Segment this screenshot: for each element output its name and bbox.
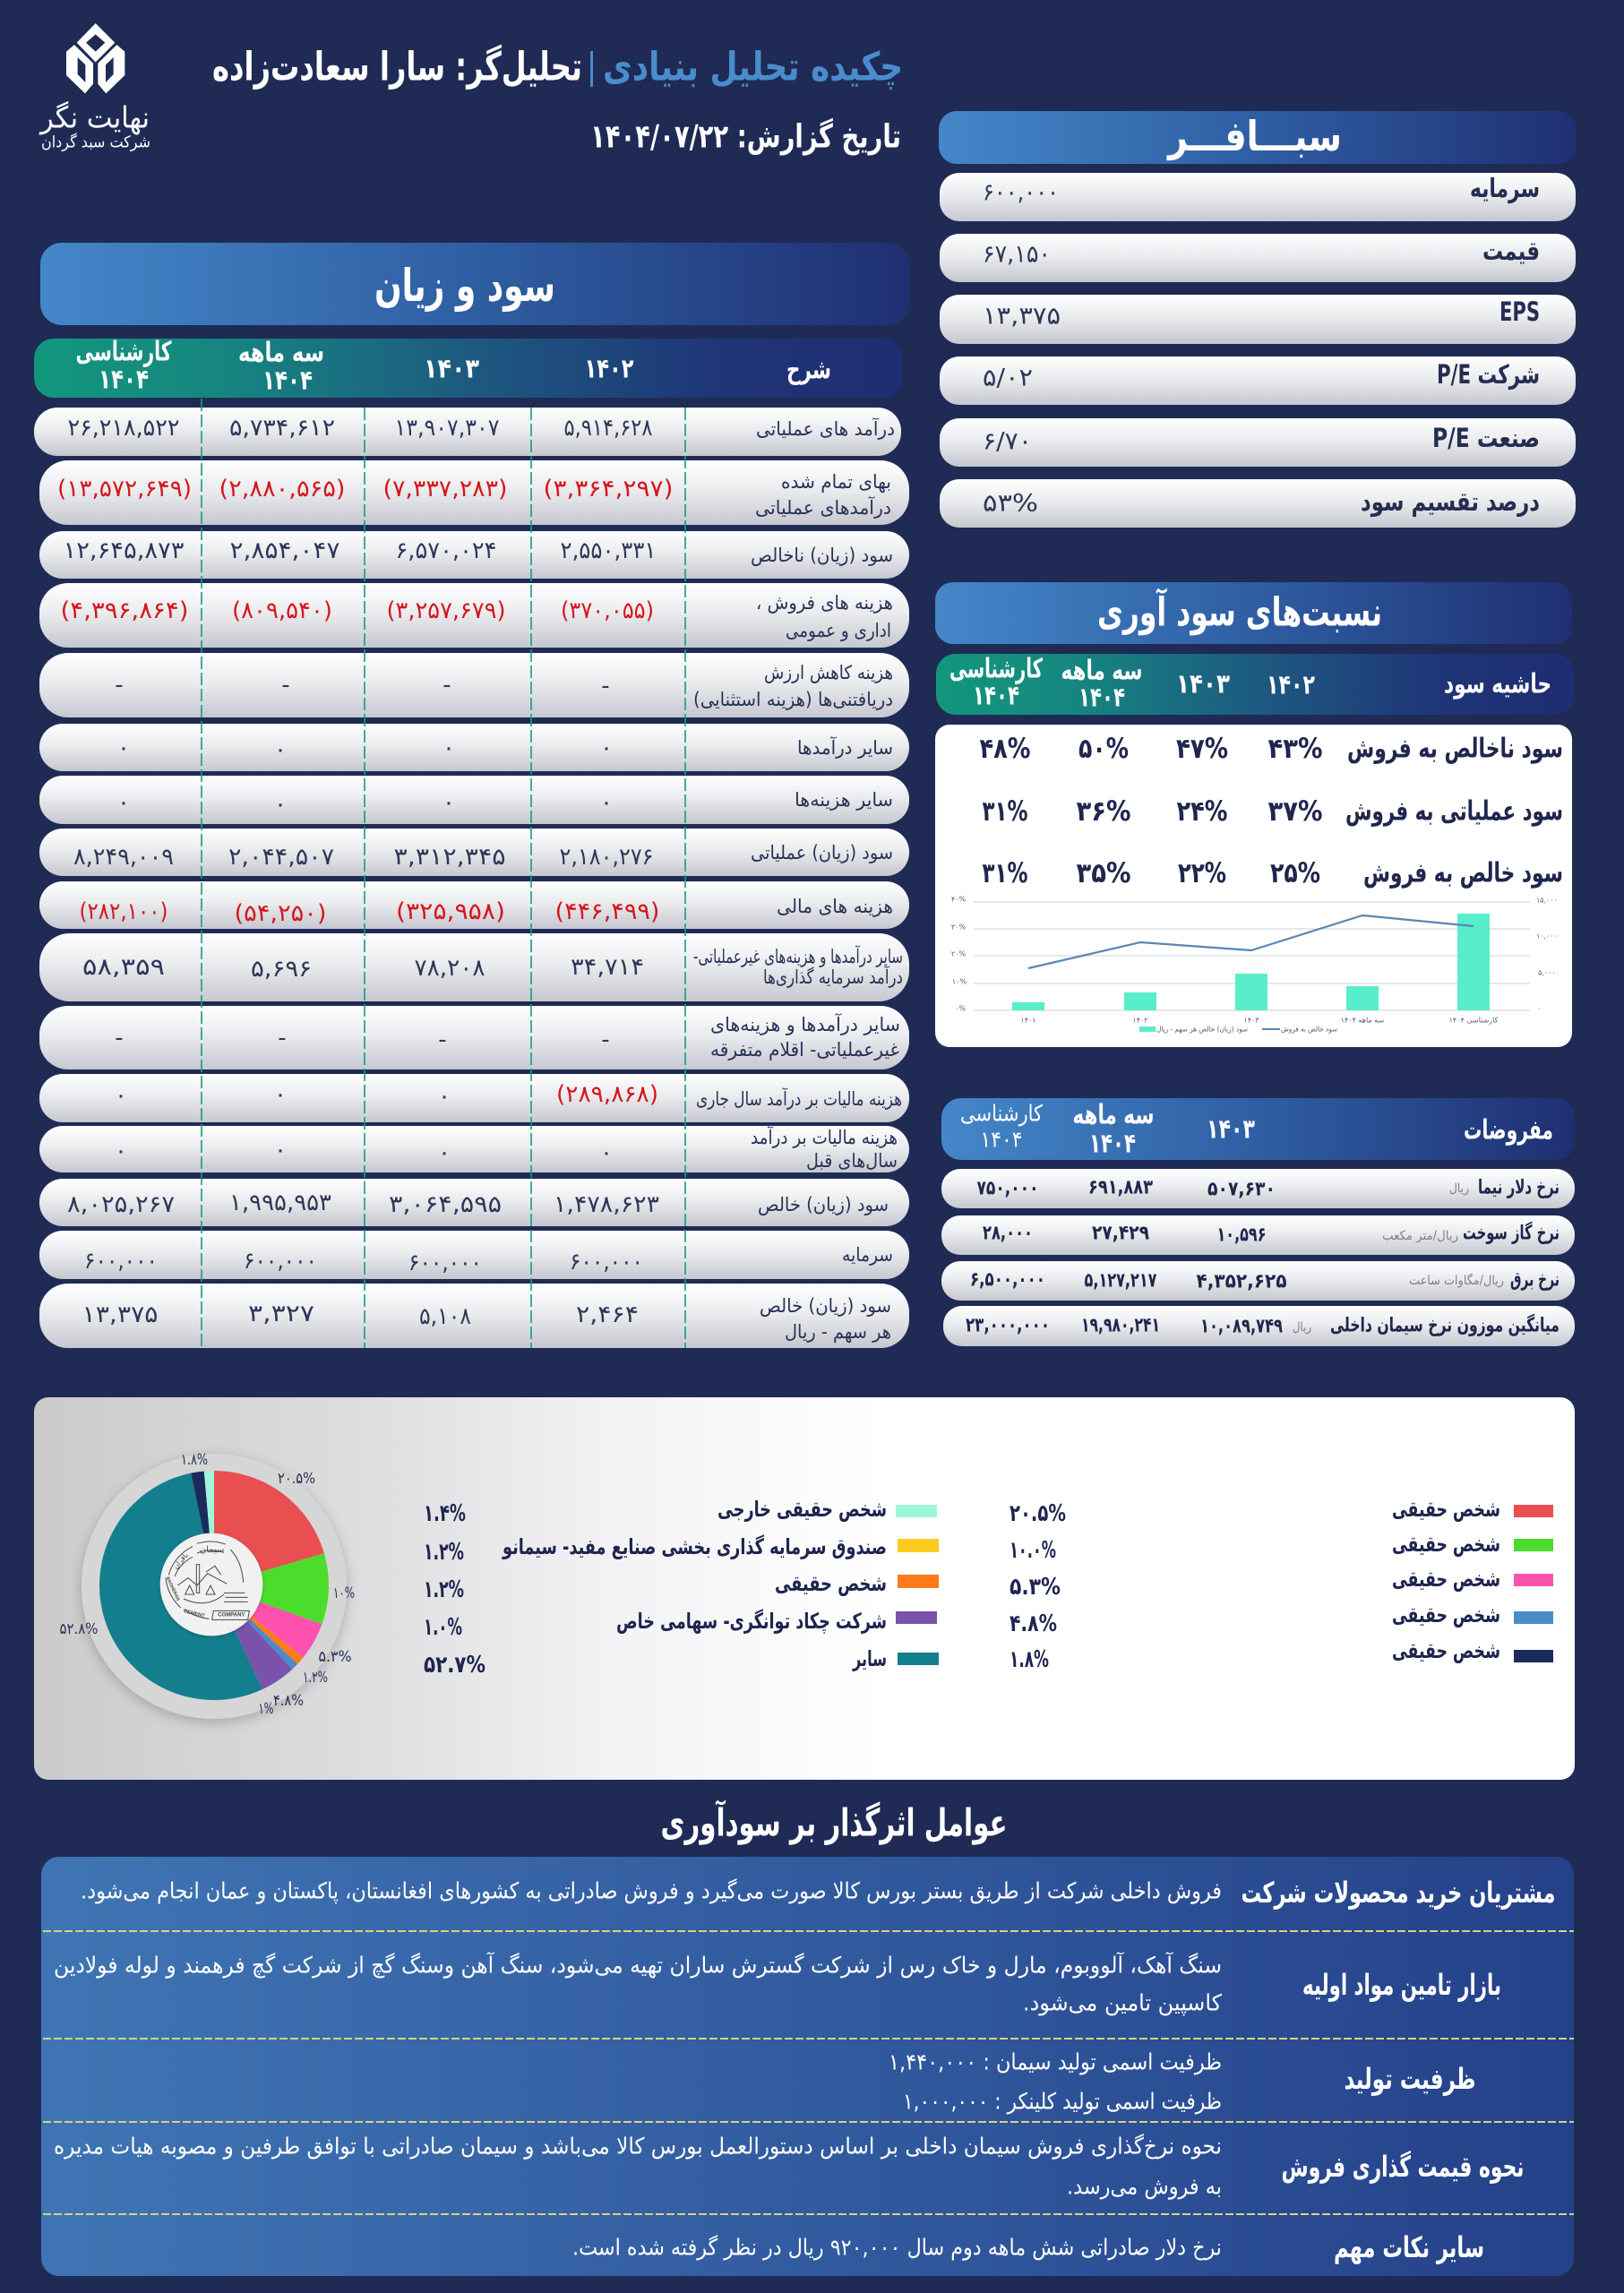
ratio: net margin: ۲۵% (1270, 857, 1320, 889)
row: net profit: ۱,۴۷۸,۶۲۳ (554, 1191, 659, 1218)
row: selling and admin expenses: (۴,۳۹۶,۸۶۴) (61, 597, 188, 624)
chart: shareholder donut (59, 1451, 355, 1719)
ratio: net margin: ۳۵% (1077, 857, 1130, 889)
row: capital: سرمایه (1470, 173, 1540, 203)
legend column 2 (502, 1497, 939, 1671)
row: other revenue: سایر درآمدها (797, 736, 893, 759)
row: gross profit: ۶,۵۷۰,۰۲۴ (396, 537, 496, 564)
table header (34, 337, 902, 398)
percentages column 1: ۱۰.۰% (1010, 1537, 1056, 1564)
row: operating revenue: ۵,۹۱۴,۶۲۸ (564, 415, 653, 442)
row: other revenue: ۰ (443, 734, 455, 761)
row: net profit: سود (زیان) خالص (758, 1194, 889, 1215)
left axis labels: ۱۰% (952, 978, 967, 985)
assumptions header: کارشناسی (960, 1100, 1043, 1127)
percentages column 2: ۵۲.۷% (424, 1652, 485, 1679)
row: capital (940, 173, 1576, 221)
row: non-operating investment income: ۵,۶۹۶ (251, 956, 312, 983)
row: EPS (940, 295, 1576, 344)
table header: سه ماهه (238, 337, 324, 369)
ratio: operating margin: ۲۴% (1177, 795, 1227, 828)
row: operating revenue (34, 408, 901, 456)
row: non-operating investment income: درآمد سرمایه گذاری‌ها (763, 966, 903, 988)
row: price: ۶۷,۱۵۰ (983, 240, 1051, 269)
row: operating revenue: ۱۳,۹۰۷,۳۰۷ (394, 415, 500, 442)
left axis labels: ۴۰% (951, 896, 966, 903)
legend column 1: شخص حقیقی (1392, 1638, 1500, 1663)
row: cost of revenue: بهای تمام شده (781, 471, 891, 493)
row: current year income tax (39, 1074, 909, 1122)
row: net profit: ۸,۰۲۵,۲۶۷ (67, 1191, 175, 1218)
row: impairment expense: - (281, 672, 290, 699)
category labels: ۱۴۰۲ (1132, 1016, 1148, 1025)
row: financial expenses: (۳۲۵,۹۵۸) (396, 898, 505, 925)
title: تحلیل‌گر: سارا سعادت‌زاده (212, 43, 582, 90)
percentages column 2: ۱.۲% (424, 1576, 464, 1603)
ratio: gross margin (980, 733, 1563, 765)
row: capital: ۶۰۰,۰۰۰ (983, 179, 1059, 206)
row: capital: ۶۰۰,۰۰۰ (84, 1248, 158, 1275)
row: other revenue (39, 724, 909, 771)
ratio: operating margin: ۳۱% (982, 795, 1028, 828)
row: current year income tax: ۰ (274, 1081, 287, 1108)
row: weighted cement price: ریال (1293, 1320, 1311, 1335)
ratio: operating margin (982, 795, 1563, 828)
left axis labels: ۳۰% (951, 923, 966, 932)
row: impairment expense (39, 653, 909, 717)
factor: sales pricing (54, 2134, 1525, 2200)
heading: profitability ratios: نسبت‌های سود آوری (1097, 588, 1382, 636)
percentages column 2 (424, 1500, 485, 1679)
row: industry P/E (940, 418, 1576, 467)
factor: sales pricing: نحوه نرخ‌گذاری فروش سیمان داخلی بر اساس دستورالعمل بورس کالا می‌باشد و سیمان صادراتی با توافق طرفین و مصوبه هیات مدیره (54, 2134, 1222, 2160)
table header: کارشناسی (75, 337, 172, 367)
percentages column 2: ۱.۴% (424, 1500, 466, 1527)
row: selling and admin expenses: (۳۷۰,۰۵۵) (561, 597, 654, 624)
row: other expenses (39, 776, 909, 824)
row: cost of revenue: درآمدهای عملیاتی (755, 496, 891, 519)
assumptions header: ۱۴۰۴ (1089, 1129, 1136, 1159)
row: other expenses: ۰ (443, 789, 455, 816)
legend column 2: شرکت چکاد توانگری- سهامی خاص (616, 1609, 887, 1634)
legend column 1 (1392, 1497, 1553, 1663)
company emblem: COMPANY (218, 1612, 245, 1618)
legend column 2: سایر (852, 1646, 887, 1671)
table header: ۱۴۰۲ (584, 353, 634, 385)
row: impairment expense: - (601, 673, 610, 700)
company emblem: سیمان (200, 1545, 224, 1555)
row: cost of revenue: (۲,۸۸۰,۵۶۵) (219, 476, 346, 502)
company emblem (160, 1533, 262, 1636)
row: Nima dollar rate (941, 1169, 1575, 1208)
row: Nima dollar rate: ۶۹۱,۸۸۳ (1088, 1177, 1153, 1198)
donut labels: ۱.۲% (303, 1669, 328, 1687)
donut labels: ۱% (258, 1700, 274, 1718)
legend column 2: صندوق سرمایه گذاری بخشی صنایع مفید- سیمانو (502, 1534, 887, 1559)
row: non-operating miscellaneous: سایر درآمدها و هزینه‌های (710, 1013, 900, 1035)
panel: shareholders (34, 1397, 1575, 1780)
heading: profitability ratios (935, 582, 1572, 644)
company emblem: CEMENT (183, 1609, 205, 1619)
icon: logo mark (66, 23, 125, 93)
factor: sales pricing: به فروش می‌رسد. (1067, 2173, 1222, 2200)
heading: profit and loss (40, 243, 909, 325)
row: current year income tax: هزینه مالیات بر درآمد سال جاری (696, 1087, 902, 1110)
row: financial expenses: هزینه های مالی (777, 896, 893, 917)
row: selling and admin expenses: هزینه های فروش ، (756, 592, 893, 614)
assumptions header (941, 1098, 1575, 1160)
row: impairment expense: - (115, 672, 124, 699)
row: electricity rate: ریال/مگاوات ساعت (1409, 1273, 1504, 1288)
row: selling and admin expenses: اداری و عمومی (786, 620, 891, 641)
row: non-operating miscellaneous: - (115, 1025, 124, 1052)
company emblem: باقران (171, 1551, 190, 1571)
row: selling and admin expenses (39, 583, 909, 648)
ratio: gross margin: ۵۰% (1078, 733, 1129, 765)
right axis labels: ۰ (1537, 1005, 1541, 1012)
row: fuel gas rate: ۲۷,۴۲۹ (1092, 1222, 1149, 1245)
ratios table header: ۱۴۰۲ (1267, 670, 1315, 700)
row: company P/E: ۵/۰۲ (983, 364, 1033, 392)
panel: profitability ratios (935, 582, 1574, 1047)
donut labels: ۵.۳% (319, 1648, 351, 1666)
row: operating profit: ۲,۱۸۰,۲۷۶ (559, 844, 654, 871)
row: financial expenses (39, 881, 909, 929)
row: prior years income tax: سال‌های قبل (806, 1150, 898, 1172)
factor: production capacity (889, 2049, 1476, 2114)
row: earnings per share: ۳,۳۲۷ (248, 1301, 314, 1327)
row: fuel gas rate: ۲۸,۰۰۰ (983, 1222, 1033, 1245)
row: gross profit: ۱۲,۶۴۵,۸۷۳ (63, 537, 185, 564)
row: operating revenue: درآمد های عملیاتی (756, 417, 895, 440)
factor: production capacity: ظرفیت اسمی تولید کلینکر : ۱,۰۰۰,۰۰۰ (903, 2089, 1222, 2114)
row: earnings per share: هر سهم - ریال (785, 1321, 891, 1344)
row: non-operating miscellaneous: - (601, 1026, 610, 1053)
row: Nima dollar rate: ۷۵۰,۰۰۰ (976, 1177, 1039, 1200)
row: Nima dollar rate: ریال (1449, 1181, 1469, 1196)
row: other expenses: ۰ (600, 789, 613, 816)
ratio: gross margin: ۴۷% (1176, 733, 1228, 765)
left axis labels: ۲۰% (951, 949, 966, 958)
panel: profitability factors (41, 1857, 1574, 2276)
row: earnings per share: سود (زیان) خالص (760, 1295, 891, 1317)
row: non-operating miscellaneous: - (438, 1026, 447, 1053)
row: weighted cement price (943, 1306, 1575, 1346)
row: current year income tax: (۲۸۹,۸۶۸) (556, 1081, 658, 1108)
row: gross profit: ۲,۸۵۴,۰۴۷ (229, 537, 340, 564)
row: dividend payout: ۵۳% (983, 489, 1038, 518)
factor: other notes (572, 2230, 1484, 2264)
row: electricity rate: ۴,۳۵۲,۶۲۵ (1197, 1270, 1286, 1293)
legend column 1: شخص حقیقی (1392, 1567, 1500, 1592)
percentages column 1: ۲۰.۵% (1010, 1500, 1066, 1527)
row: Nima dollar rate: ۵۰۷,۶۳۰ (1207, 1179, 1276, 1200)
row: current year income tax: ۰ (115, 1082, 127, 1109)
row: electricity rate: ۵,۱۲۷,۲۱۷ (1084, 1270, 1157, 1292)
ratios table header: ۱۴۰۴ (1078, 683, 1125, 713)
row: non-operating investment income: سایر درآمدها و هزینه‌های غیرعملیاتی- (693, 945, 903, 967)
row: gross profit (39, 531, 909, 579)
logo (39, 23, 150, 151)
row: operating profit (39, 829, 909, 876)
ratio: operating margin: ۳۷% (1268, 795, 1322, 828)
row: operating revenue: ۲۶,۲۱۸,۵۲۲ (68, 415, 179, 442)
row: electricity rate: ۶,۵۰۰,۰۰۰ (970, 1268, 1045, 1292)
row: non-operating investment income: ۵۸,۳۵۹ (82, 954, 165, 981)
row: financial expenses: (۲۸۲,۱۰۰) (79, 898, 168, 925)
category labels: کارشناسی ۱۴۰۴ (1449, 1016, 1499, 1025)
company emblem: BAGHERAN (165, 1576, 181, 1602)
row: earnings per share: ۲,۴۶۴ (576, 1301, 639, 1328)
legend column 2: شخص حقیقی (775, 1571, 887, 1596)
donut labels: ۱۰% (333, 1584, 355, 1602)
row: weighted cement price: ۱۰,۰۸۹,۷۴۹ (1200, 1315, 1283, 1338)
assumptions header: ۱۴۰۳ (1207, 1114, 1255, 1145)
table header: ۱۴۰۴ (262, 365, 313, 396)
row: electricity rate (941, 1261, 1575, 1301)
row: capital: ۶۰۰,۰۰۰ (244, 1248, 317, 1275)
factor: other notes: نرخ دلار صادراتی شش ماهه دوم سال ۹۲۰,۰۰۰ ریال در نظر گرفته شده است. (572, 2234, 1222, 2261)
row: EPS: ۱۳,۳۷۵ (983, 303, 1061, 330)
row: financial expenses: (۵۴,۲۵۰) (235, 900, 326, 927)
logo name: نهایت نگر (39, 100, 150, 134)
percentages column 1 (1010, 1500, 1066, 1673)
right axis labels: ۱۰,۰۰۰ (1536, 932, 1558, 940)
row: other expenses: ۰ (117, 789, 130, 816)
row: cost of revenue: (۳,۳۶۴,۲۹۷) (543, 476, 674, 502)
row: impairment expense: دریافتنی‌ها (هزینه استثنایی) (693, 689, 893, 710)
chart: EPS bars and net margin line (951, 896, 1558, 1034)
right axis labels (1536, 896, 1558, 1012)
factor: customers: فروش داخلی شرکت از طریق بستر بورس کالا صورت می‌گیرد و فروش صادراتی به کشورهای افغانستان، پاکستان و عمان انجام می‌شود. (81, 1877, 1222, 1904)
table header: ۱۴۰۳ (424, 353, 479, 385)
row: other revenue: ۰ (600, 734, 613, 761)
row: impairment expense: هزینه کاهش ارزش (764, 662, 893, 683)
row: prior years income tax (39, 1126, 909, 1172)
row: non-operating miscellaneous: - (278, 1025, 287, 1052)
factor: raw material market: کاسپین تامین می‌شود. (1023, 1990, 1222, 2015)
ratios table header: کارشناسی (949, 654, 1043, 684)
row: financial expenses: (۴۴۶,۴۹۹) (555, 898, 659, 925)
row: capital: سرمایه (842, 1244, 893, 1266)
row: weighted cement price: ۲۳,۰۰۰,۰۰۰ (966, 1315, 1050, 1336)
row: earnings per share: ۵,۱۰۸ (419, 1303, 471, 1330)
legend column 1: شخص حقیقی (1392, 1532, 1500, 1557)
row: net profit (39, 1179, 909, 1226)
row: operating profit: ۸,۲۴۹,۰۰۹ (73, 844, 174, 871)
factor: raw material market (54, 1951, 1501, 2015)
category labels (1020, 1016, 1499, 1025)
right axis labels: ۵,۰۰۰ (1538, 969, 1556, 976)
row: earnings per share: ۱۳,۳۷۵ (82, 1301, 158, 1328)
left axis labels (951, 896, 967, 1012)
row: industry P/E: ۶/۷۰ (983, 428, 1032, 455)
row: price: قیمت (1482, 236, 1540, 266)
ratio: net margin: ۳۱% (982, 857, 1028, 889)
row: net profit: ۱,۹۹۵,۹۵۳ (229, 1189, 331, 1216)
row: company P/E: شرکت P/E (1437, 359, 1540, 390)
panel: profit and loss (34, 243, 909, 1348)
heading: factors affecting profitability: عوامل اثرگذار بر سودآوری (661, 1800, 1007, 1845)
row: EPS: EPS (1499, 296, 1540, 327)
factor: raw material market: سنگ آهک، آلووبوم، مارل و خاک رس از شرکت گسترش ساران تهیه می‌شود، سنگ آهن وسنگ گچ از شرکت گچ فرهمند و لوله فولادین (54, 1951, 1222, 1980)
heading: profit and loss: سود و زیان (374, 260, 555, 313)
row: cost of revenue (39, 460, 909, 525)
factor: production capacity: ظرفیت تولید (1344, 2062, 1476, 2096)
row: other revenue: ۰ (274, 736, 287, 763)
chart bars (1012, 914, 1490, 1010)
ratios table header: ۱۴۰۳ (1176, 668, 1230, 700)
row: fuel gas rate: ۱۰,۵۹۶ (1216, 1224, 1267, 1247)
factor: production capacity: ظرفیت اسمی تولید سیمان : ۱,۴۴۰,۰۰۰ (889, 2049, 1222, 2074)
category labels: ۱۴۰۱ (1020, 1016, 1036, 1025)
row: operating revenue: ۵,۷۳۴,۶۱۲ (229, 415, 335, 442)
row: weighted cement price: ۱۹,۹۸۰,۲۴۱ (1081, 1315, 1160, 1336)
row: fuel gas rate (941, 1215, 1575, 1255)
right axis labels: ۱۵,۰۰۰ (1536, 896, 1558, 905)
row: operating profit: سود (زیان) عملیاتی (751, 842, 893, 863)
factor: raw material market: بازار تامین مواد اولیه (1302, 1968, 1501, 2002)
logo subtitle: شرکت سبد گردان (41, 133, 150, 152)
row: fuel gas rate: ریال/متر مکعب (1382, 1229, 1458, 1243)
donut labels: ۱.۸% (181, 1451, 208, 1469)
percentages column 1: ۵.۳% (1010, 1574, 1061, 1601)
ratios white card (935, 725, 1572, 1047)
row: other expenses: سایر هزینه‌ها (795, 789, 893, 811)
ratios table header: سه ماهه (1061, 656, 1143, 686)
donut labels: ۲۰.۵% (278, 1470, 315, 1488)
row: cost of revenue: (۱۳,۵۷۲,۶۴۹) (57, 476, 192, 502)
row: non-operating miscellaneous (39, 1006, 909, 1069)
row: cost of revenue: (۷,۳۳۷,۲۸۳) (383, 476, 507, 502)
row: selling and admin expenses: (۳,۲۵۷,۶۷۹) (387, 597, 505, 624)
row: price (940, 234, 1576, 282)
factor: other notes: سایر نکات مهم (1334, 2230, 1484, 2264)
report date: تاریخ گزارش: ۱۴۰۴/۰۷/۲۲ (590, 118, 901, 156)
row: dividend payout: درصد تقسیم سود (1361, 486, 1540, 517)
percentages column 2: ۱.۰% (424, 1614, 462, 1641)
row: dividend payout (940, 479, 1576, 528)
assumptions header: ۱۴۰۴ (980, 1127, 1023, 1152)
row: company P/E (940, 356, 1576, 405)
factor: customers (81, 1876, 1555, 1910)
table header: شرح (786, 355, 831, 385)
row: capital: ۶۰۰,۰۰۰ (570, 1249, 643, 1275)
row: selling and admin expenses: (۸۰۹,۵۴۰) (232, 597, 332, 624)
percentages column 2: ۱.۲% (424, 1539, 464, 1566)
row: capital (39, 1231, 909, 1279)
legend column 2: شخص حقیقی خارجی (717, 1497, 887, 1522)
row: prior years income tax: ۰ (274, 1137, 287, 1164)
category labels: ۱۴۰۳ (1243, 1016, 1259, 1025)
percentages column 1: ۱.۸% (1010, 1646, 1049, 1673)
donut labels (59, 1451, 355, 1718)
row: electricity rate: نرخ برق (1510, 1268, 1560, 1292)
ratio: net margin: ۲۲% (1178, 857, 1226, 889)
ratio: gross margin: ۴۳% (1268, 733, 1322, 765)
heading: company name (939, 111, 1577, 164)
ratio: net margin (982, 857, 1563, 889)
heading: company name: سبـــافـــر (1166, 112, 1342, 160)
row: Nima dollar rate: نرخ دلار نیما (1478, 1177, 1560, 1198)
assumptions header: مفروضات (1464, 1114, 1553, 1146)
percentages column 1: ۴.۸% (1010, 1610, 1057, 1637)
table header: ۱۴۰۴ (99, 364, 149, 396)
row: current year income tax: ۰ (438, 1083, 451, 1110)
panel: assumptions (941, 1098, 1575, 1346)
row: gross profit: ۲,۵۵۰,۳۳۱ (561, 537, 656, 564)
donut labels: ۴.۸% (273, 1692, 304, 1710)
row: operating profit: ۲,۰۴۴,۵۰۷ (228, 844, 334, 871)
ratios table header: ۱۴۰۴ (973, 681, 1019, 711)
row: prior years income tax: ۰ (438, 1139, 451, 1166)
row: prior years income tax: ۰ (115, 1138, 127, 1164)
chart legend: سود (زیان) خالص هر سهم - ریال (1156, 1025, 1248, 1034)
ratio: gross margin: ۴۸% (980, 733, 1030, 765)
row: capital: ۶۰۰,۰۰۰ (408, 1250, 482, 1276)
row: gross profit: سود (زیان) ناخالص (751, 545, 893, 566)
row: prior years income tax: ۰ (600, 1139, 613, 1166)
legend column 1: شخص حقیقی (1392, 1602, 1500, 1627)
chart legend (1139, 1025, 1337, 1034)
chart line (1028, 915, 1474, 968)
row: non-operating miscellaneous: غیرعملیاتی- اقلام متفرقه (710, 1039, 899, 1061)
row: earnings per share (39, 1284, 909, 1348)
row: net profit: ۳,۰۶۴,۵۹۵ (389, 1191, 502, 1218)
ratios table header (936, 654, 1574, 715)
row: other expenses: ۰ (274, 791, 287, 818)
row: other revenue: ۰ (117, 734, 130, 761)
row: industry P/E: صنعت P/E (1432, 423, 1540, 453)
row: non-operating investment income: ۳۴,۷۱۴ (571, 954, 644, 981)
ratios table header: حاشیه سود (1444, 668, 1551, 700)
row: non-operating investment income: ۷۸,۲۰۸ (414, 955, 485, 982)
row: operating profit: ۳,۳۱۲,۳۴۵ (394, 844, 505, 871)
panel: company summary (939, 111, 1577, 528)
legend column 1: شخص حقیقی (1392, 1497, 1500, 1522)
category labels: سه ماهه ۱۴۰۴ (1341, 1016, 1385, 1025)
donut slices (99, 1471, 329, 1700)
chart legend: سود خالص به فروش (1281, 1025, 1337, 1034)
donut labels: ۵۲.۸% (59, 1620, 99, 1638)
row: impairment expense: - (443, 672, 451, 699)
row: non-operating investment income (39, 933, 909, 1001)
title: چکیده تحلیل بنیادی (603, 45, 903, 90)
row: prior years income tax: هزینه مالیات بر درآمد (751, 1126, 898, 1148)
left axis labels: ۰% (955, 1005, 966, 1012)
ratio: operating margin: ۳۶% (1077, 795, 1130, 828)
assumptions header: سه ماهه (1073, 1100, 1154, 1130)
row: fuel gas rate: نرخ گاز سوخت (1463, 1220, 1560, 1245)
